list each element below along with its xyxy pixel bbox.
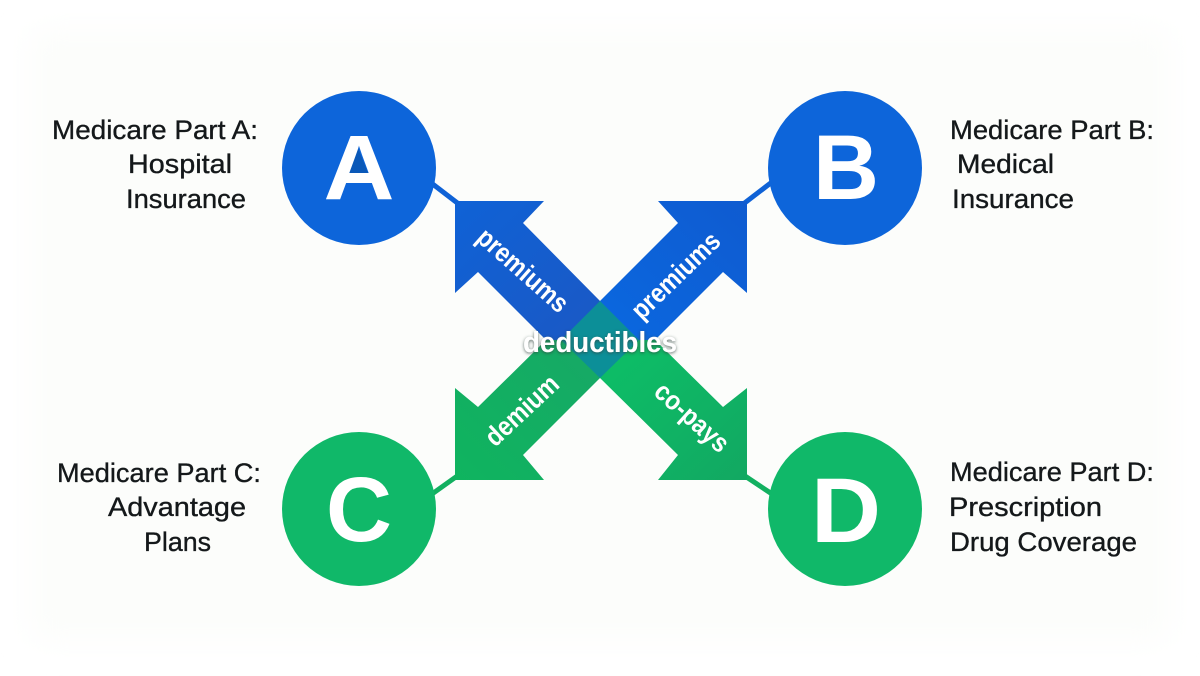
circle C xyxy=(282,432,436,586)
circle C: C xyxy=(326,459,392,561)
circle A: A xyxy=(324,117,394,219)
connector: C to arrow xyxy=(432,474,460,494)
label: Part B xyxy=(950,115,1154,214)
label: Part B: Medical xyxy=(957,149,1054,179)
arrow: to A xyxy=(455,201,600,340)
connector: D to arrow xyxy=(742,474,772,494)
arrow text: premiums right: premiums xyxy=(625,226,726,325)
label: Part A: Insurance xyxy=(126,184,246,214)
arrow: to C xyxy=(455,340,600,480)
circle D xyxy=(768,432,922,586)
label: Part A: Medicare Part A: xyxy=(52,115,258,145)
arrow: to B xyxy=(600,201,747,340)
label: Part B: Medicare Part B: xyxy=(950,115,1154,145)
label: Part B: Insurance xyxy=(952,184,1074,214)
label: Part D: Prescription xyxy=(949,492,1102,522)
circle A xyxy=(282,91,436,245)
label: Part A: Hospital xyxy=(128,149,232,179)
label: Part C: Plans xyxy=(144,527,211,557)
arrow: to D xyxy=(600,340,747,480)
connector: A to arrow xyxy=(430,182,460,205)
arrow text: premiums left: premiums xyxy=(471,222,575,319)
label: Part D: Medicare Part D: xyxy=(950,457,1154,487)
label: Part C: Medicare Part C: xyxy=(57,458,261,488)
label: Part D xyxy=(949,457,1154,557)
connector: B to arrow xyxy=(742,182,772,205)
label: Part D: Drug Coverage xyxy=(950,527,1137,557)
label: Part C: Advantage xyxy=(108,492,246,522)
arrow text: co-pays: co-pays xyxy=(649,376,736,459)
circle B xyxy=(768,91,922,245)
label: Part A xyxy=(52,115,258,214)
circle D: D xyxy=(811,460,881,562)
arrow text: demium: demium xyxy=(479,369,565,452)
label: Part C xyxy=(57,458,261,557)
center diamond xyxy=(561,301,639,378)
center text: deductibles: deductibles xyxy=(523,327,677,359)
circle B: B xyxy=(813,117,879,219)
